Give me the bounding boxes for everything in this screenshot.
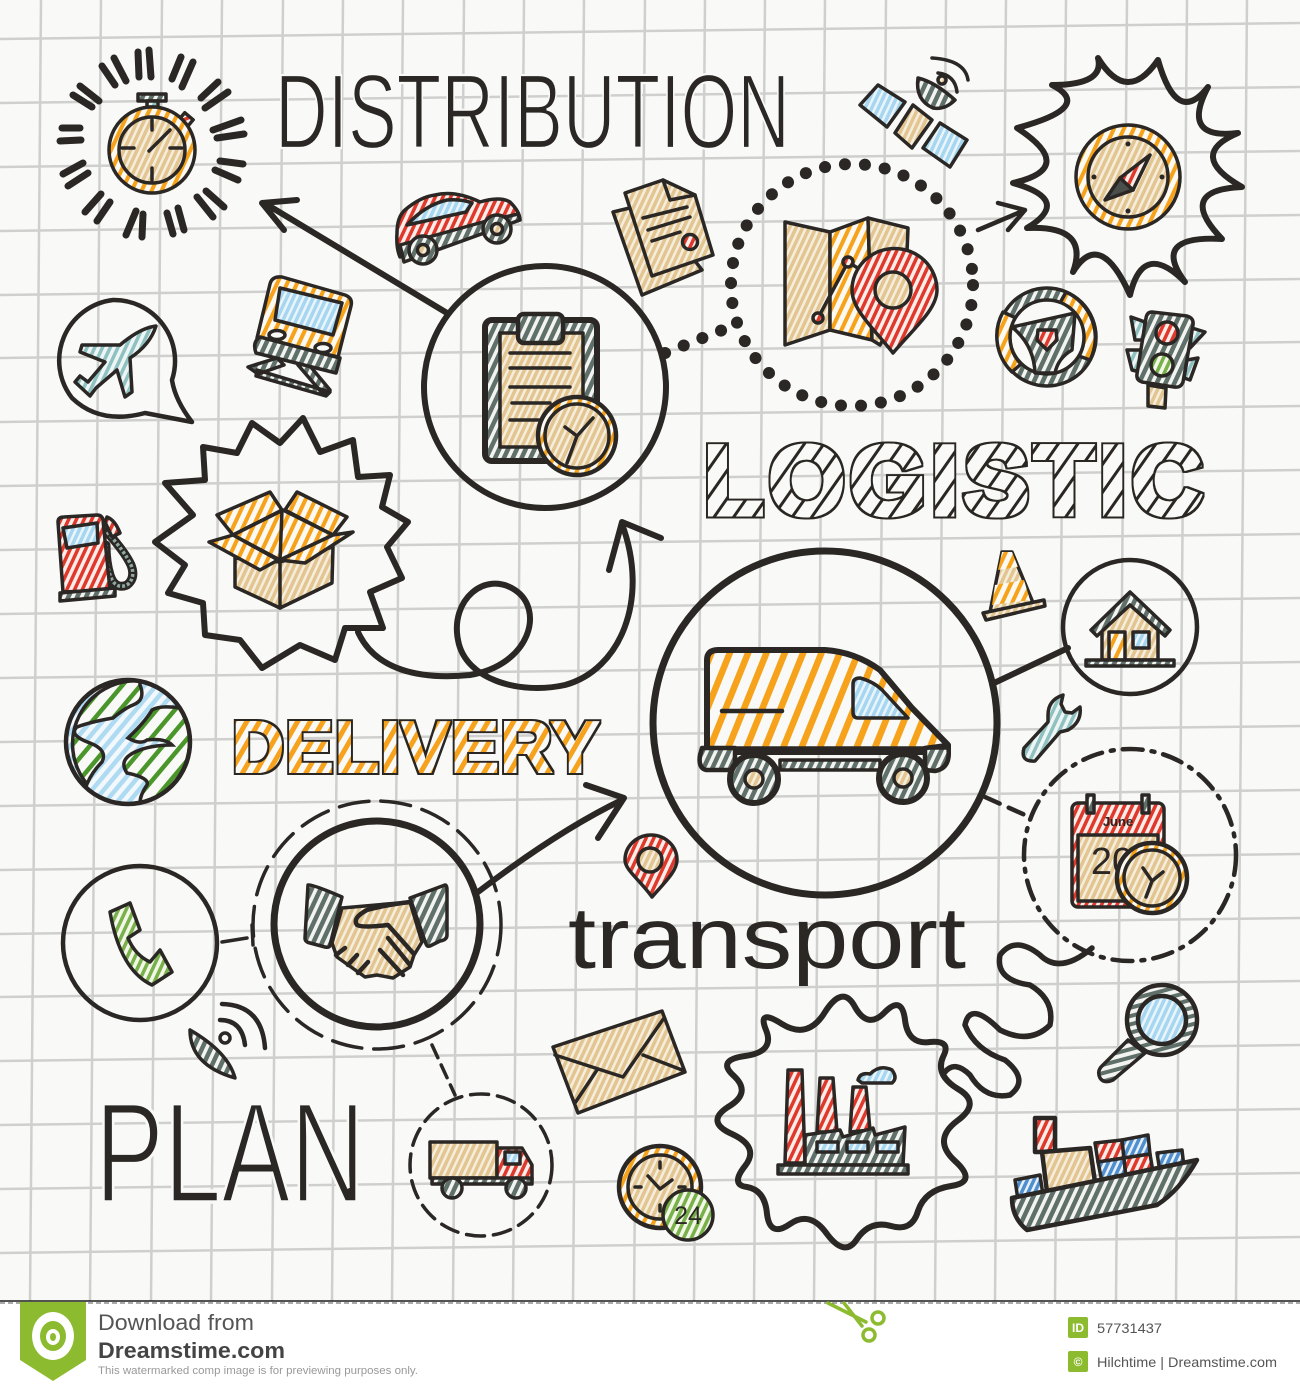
icon: stopwatch with radial ticks <box>60 50 244 237</box>
heading: DELIVERY: DELIVERY <box>232 708 599 788</box>
wavy blob: factory <box>717 997 970 1247</box>
icon: fuel pump <box>58 515 133 601</box>
squiggle: factory to calendar <box>945 945 1092 1096</box>
icon: magnifier <box>1099 985 1197 1082</box>
icon: envelope <box>553 1011 685 1113</box>
footer image id: ID <box>1072 1321 1084 1335</box>
footer credit: © <box>1074 1355 1083 1369</box>
circle: clipboard with clock <box>424 266 666 508</box>
icon: traffic cone <box>983 552 1045 620</box>
icon: scissors <box>828 1303 884 1341</box>
icon: 24 hour clock <box>619 1146 713 1240</box>
dotted circle: map and pin <box>731 164 973 406</box>
icon: airplane speech bubble <box>59 300 192 422</box>
arrow: handshake to van <box>478 785 624 892</box>
footer text: This watermarked comp image is for previewing purposes only. <box>98 1365 418 1377</box>
icon: globe <box>66 680 190 804</box>
footer background <box>0 1302 1300 1390</box>
circle: phone <box>63 866 217 1020</box>
dashed link: van to calendar <box>985 797 1025 815</box>
icon: location pin <box>625 835 677 897</box>
icon: box in starburst <box>155 418 408 668</box>
icon: steering wheel <box>997 288 1096 386</box>
icon: compass in spiky burst <box>1013 58 1242 295</box>
dots: link clipboard to map <box>665 325 735 353</box>
circle: delivery van <box>653 551 997 895</box>
dashed circle: handshake <box>253 801 501 1049</box>
footer image id <box>1068 1317 1162 1338</box>
arrow: clipboard to stopwatch <box>262 200 447 313</box>
footer divider <box>0 1301 1300 1303</box>
arrow: map to compass <box>978 203 1025 230</box>
dashed link: phone to handshake <box>222 925 253 945</box>
circle: house <box>1063 560 1197 694</box>
icon: 24 hour clock: 24 <box>674 1202 702 1230</box>
heading: DISTRIBUTION: DISTRIBUTION <box>275 53 790 171</box>
icon: wifi dish <box>190 1004 265 1078</box>
dashed circle: calendar with clock: 20 <box>1091 841 1133 883</box>
icon: train <box>248 277 351 396</box>
dashed circle: calendar with clock <box>1024 749 1236 961</box>
icon: cargo ship <box>1012 1118 1197 1230</box>
heading: PLAN: PLAN <box>95 1074 365 1233</box>
heading: LOGISTIC: LOGISTIC <box>704 426 1202 535</box>
footer ribbon logo <box>20 1302 86 1381</box>
footer text <box>98 1310 418 1377</box>
link: van to house <box>992 648 1068 684</box>
dashed circle: calendar with clock: June <box>1103 814 1133 829</box>
dashed circle: truck <box>410 1094 552 1236</box>
dashed link: handshake to truck <box>432 1045 455 1095</box>
arrow: loop to clipboard <box>358 522 661 688</box>
icon: satellite <box>860 58 968 167</box>
icon: wrench <box>1023 695 1080 761</box>
footer credit: Hilchtime | Dreamstime.com <box>1097 1354 1277 1370</box>
footer text: Dreamstime.com <box>98 1338 285 1363</box>
footer credit <box>1068 1351 1277 1372</box>
icon: car <box>397 194 520 264</box>
heading: transport: transport <box>568 890 966 987</box>
icon: traffic light <box>1127 312 1205 408</box>
footer text: Download from <box>98 1310 254 1335</box>
icon: documents <box>613 180 713 295</box>
footer image id: 57731437 <box>1097 1320 1162 1336</box>
